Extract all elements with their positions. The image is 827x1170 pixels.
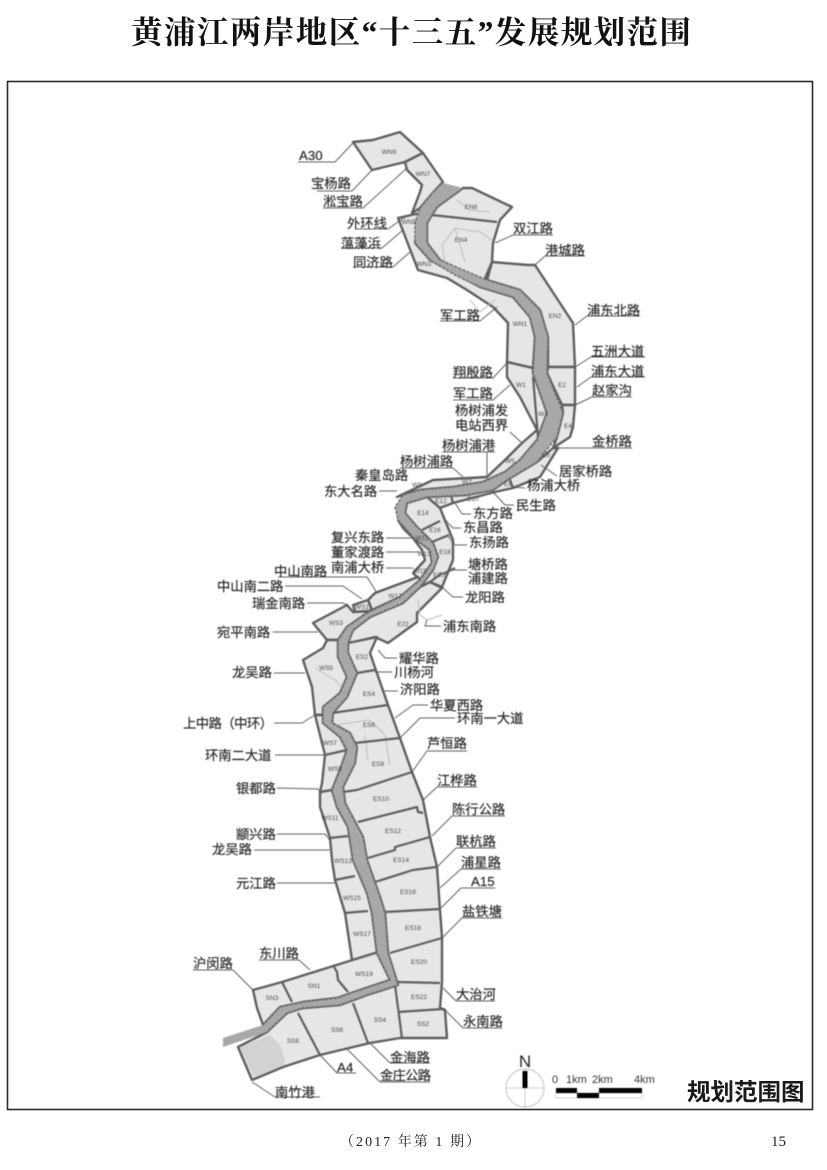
minor roads (315, 200, 495, 765)
label: 居家桥路: 居家桥路 (559, 463, 612, 479)
parcel codes: WS13 (334, 858, 352, 865)
label: 东昌路: 东昌路 (463, 520, 503, 535)
label: 翔殷路: 翔殷路 (453, 365, 493, 380)
parcel codes: W9 (412, 482, 422, 489)
label: 东方路 (455, 503, 513, 521)
parcel codes: W11 (416, 535, 429, 542)
label: 杨树浦路 (400, 454, 463, 477)
label: 元江路: 元江路 (236, 876, 276, 891)
label: 浦东大道 (577, 364, 645, 387)
road labels (183, 143, 645, 1100)
SS8 shaded area (240, 1035, 285, 1077)
label: 金庄公路: 金庄公路 (380, 1068, 431, 1083)
parcel codes: E2 (558, 382, 566, 389)
parcel codes: WS1 (355, 604, 369, 611)
label: 五洲大道: 五洲大道 (591, 344, 644, 359)
label: 外环线: 外环线 (347, 216, 387, 231)
parcel codes: W7 (462, 479, 472, 486)
label: 东扬路 (448, 535, 509, 550)
map name: 规划范围图 (687, 1079, 804, 1105)
footer: page number: 15 (771, 1134, 786, 1150)
parcel codes: EN6 (465, 204, 478, 211)
label: 浦东北路: 浦东北路 (587, 303, 640, 318)
label: 淞宝路: 淞宝路 (323, 194, 363, 209)
label: 银都路: 银都路 (236, 781, 276, 796)
parcel codes: W13 (417, 551, 431, 558)
label: 中山南二路: 中山南二路 (217, 579, 283, 594)
parcel codes: E10 (467, 496, 479, 503)
parcel codes: ES8 (372, 761, 385, 768)
parcel codes: W17 (388, 593, 402, 600)
parcel codes: E12 (435, 498, 447, 505)
label: 港城路 (535, 243, 585, 265)
label: 复兴东路 (331, 530, 413, 545)
scale bar: 0 (552, 1074, 558, 1086)
parcel codes: SS6 (331, 1027, 344, 1034)
label: 川杨河 (375, 665, 434, 680)
label: 宛平南路 (217, 625, 318, 640)
label: 蕰藻浜 (341, 230, 403, 251)
label: 董家渡路: 董家渡路 (331, 544, 384, 560)
label: 东川路 (259, 946, 310, 970)
label: A30: A30 (299, 148, 323, 163)
label: 浦星路 (440, 855, 501, 888)
label: 陈行公路: 陈行公路 (452, 801, 505, 817)
label: 环南二大道: 环南二大道 (205, 748, 271, 763)
parcel codes: SS4 (374, 1017, 387, 1024)
label: 龙吴路 (232, 665, 305, 680)
parcel codes: EN4 (455, 237, 468, 244)
label: 同济路: 同济路 (353, 255, 393, 270)
label: 耀华路 (378, 650, 439, 666)
label: 金桥路 (553, 434, 632, 449)
label: 塘桥路 浦建路 (452, 557, 508, 586)
scale bar: 2km (592, 1074, 613, 1086)
label: 复兴东路: 复兴东路 (331, 530, 384, 545)
label: 南竹港: 南竹港 (275, 1085, 316, 1100)
label: 东扬路: 东扬路 (469, 535, 509, 550)
river: Huangpu River (223, 183, 563, 1047)
label: 芦恒路: 芦恒路 (427, 736, 467, 751)
label: A15: A15 (471, 874, 495, 889)
parcel codes: SN1 (308, 983, 321, 990)
label: 杨树浦发电站西界: 杨树浦发 (455, 403, 508, 418)
label: 盐铁塘 (442, 904, 502, 938)
label: 军工路 south (453, 385, 510, 401)
label: 联杭路 (437, 834, 496, 867)
label: 翔殷路 (453, 363, 507, 380)
label: 浦东大道: 浦东大道 (591, 364, 644, 379)
parcel codes: E14 (417, 510, 429, 517)
label: 军工路 north (440, 307, 497, 323)
parcel codes: WS15 (343, 895, 361, 902)
parcel codes: WS9 (328, 766, 342, 773)
label: 军工路 north: 军工路 (440, 308, 480, 323)
label: 杨浦大桥: 杨浦大桥 (527, 478, 580, 493)
label: 浦东南路: 浦东南路 (443, 619, 496, 634)
parcel codes: W15 (413, 568, 427, 575)
parcel codes: WS3 (329, 620, 343, 627)
parcel codes: ES14 (393, 857, 409, 864)
label: 杨树浦发电站西界: 电站西界 (455, 418, 508, 433)
parcel codes: E20 (433, 572, 445, 579)
label: 东方路: 东方路 (473, 506, 513, 521)
label: 塘桥路 浦建路: 浦建路 (468, 571, 508, 586)
label: 龙阳路 (442, 587, 505, 605)
label: 东大名路: 东大名路 (324, 484, 377, 499)
label: 江桦路: 江桦路 (437, 773, 477, 788)
label: 塘桥路 浦建路: 塘桥路 (468, 557, 508, 572)
label: 浦星路: 浦星路 (461, 855, 501, 870)
label: 赵家沟 (575, 382, 632, 405)
label: 银都路 (236, 781, 322, 796)
label: 军工路 south: 军工路 (453, 386, 493, 401)
parcel codes: WS11 (321, 815, 339, 822)
parcel codes: E4 (564, 423, 572, 430)
label: 川杨河: 川杨河 (394, 665, 434, 680)
parcel codes: SS8 (287, 1038, 300, 1045)
parcel codes: W5 (505, 458, 515, 465)
label: 金庄公路 (347, 1049, 431, 1083)
label: A15 (441, 874, 495, 908)
parcel codes: SN3 (266, 995, 279, 1002)
parcel codes: ES10 (373, 796, 389, 803)
label: 港城路: 港城路 (545, 243, 585, 258)
parcel codes: WS17 (353, 931, 371, 938)
label: 元江路 (236, 876, 335, 891)
parcel codes: WN1 (513, 321, 528, 328)
label: 宝杨路 (311, 170, 372, 191)
label: A30 (298, 143, 353, 163)
label: 外环线 (347, 216, 405, 231)
parcel codes: ES12 (385, 828, 401, 835)
parcel codes: WN5 (402, 219, 417, 226)
label: 秦皇岛路: 秦皇岛路 (355, 468, 408, 483)
parcel codes: ES2 (356, 654, 369, 661)
label: 济阳路: 济阳路 (400, 682, 440, 697)
parcel codes (266, 149, 572, 1045)
north arrow: N (519, 1052, 531, 1071)
label: 耀华路: 耀华路 (399, 651, 439, 666)
label: 南浦大桥 (331, 560, 413, 575)
label: 蕰藻浜: 蕰藻浜 (341, 236, 381, 251)
label: 江桦路 (423, 773, 477, 800)
parcel codes: ES4 (363, 691, 376, 698)
parcel codes: ES6 (363, 722, 376, 729)
label: 沪闵路 (193, 956, 253, 990)
parcel codes: E6 (542, 452, 550, 459)
scale bar: 1km (566, 1074, 587, 1086)
parcel codes: WS19 (355, 971, 373, 978)
parcel codes: WS5 (319, 665, 333, 672)
label: 沪闵路: 沪闵路 (193, 956, 233, 971)
label: 杨树浦港 (442, 438, 496, 477)
label: 金桥路: 金桥路 (592, 434, 632, 449)
label: 瑞金南路: 瑞金南路 (252, 596, 305, 611)
footer: issue: （2017 年第 1 期） (340, 1133, 480, 1150)
label: 芦恒路 (412, 736, 467, 772)
label: 中山南路 (274, 564, 377, 593)
label: 上中路（中环）: 上中路（中环） (183, 716, 273, 731)
parcel codes: WN9 (382, 149, 397, 156)
label: 永南路: 永南路 (463, 1014, 503, 1029)
label: 颛兴路 (236, 827, 330, 842)
label: 赵家沟: 赵家沟 (592, 382, 632, 398)
parcel codes: E8 (504, 481, 512, 488)
label: 陈行公路 (432, 801, 505, 836)
label: 金海路 (370, 1043, 430, 1065)
parcel codes: W3 (538, 411, 548, 418)
label: 民生路 (493, 492, 556, 513)
label: 联杭路: 联杭路 (456, 834, 496, 849)
label: 环南二大道 (205, 748, 325, 763)
label: 永南路 (443, 1008, 503, 1029)
label: 东昌路 (445, 520, 503, 535)
map: planning area (223, 132, 575, 1080)
label: 华夏西路 (395, 698, 483, 718)
label: 同济路 (353, 252, 410, 270)
north arrow (506, 1052, 544, 1107)
parcel codes: W1 (516, 382, 526, 389)
label: 宛平南路: 宛平南路 (217, 625, 270, 640)
label: 五洲大道 (575, 344, 645, 367)
label: 瑞金南路 (252, 596, 347, 611)
label: 宝杨路: 宝杨路 (311, 176, 351, 191)
label: 杨树浦路: 杨树浦路 (400, 454, 453, 469)
label: 龙吴路 south (212, 842, 330, 857)
label: 淞宝路 (323, 168, 407, 209)
parcel codes: E18 (439, 549, 451, 556)
parcel codes: ES20 (411, 959, 427, 966)
label: 大治河: 大治河 (456, 987, 496, 1002)
label: A4: A4 (337, 1060, 353, 1075)
label: 盐铁塘: 盐铁塘 (462, 904, 502, 919)
label: 民生路: 民生路 (516, 498, 556, 513)
label: 南竹港 (252, 1082, 320, 1100)
parcel codes: WS7 (323, 740, 337, 747)
label: 华夏西路: 华夏西路 (430, 698, 483, 713)
label: 环南一大道: 环南一大道 (457, 711, 523, 726)
label: 南浦大桥: 南浦大桥 (331, 560, 384, 575)
label: 龙吴路: 龙吴路 (232, 665, 272, 680)
label: 东川路: 东川路 (259, 946, 299, 961)
parcel codes: EN2 (549, 313, 562, 320)
scale bar: 4km (634, 1074, 655, 1086)
label: 环南一大道 (400, 711, 523, 738)
label: 双江路 (495, 221, 553, 243)
parcel dividers (282, 215, 538, 1055)
parcel codes: E22 (397, 621, 409, 628)
scale bar (552, 1074, 655, 1098)
label: 中山南二路 (217, 579, 362, 599)
label: 中山南路: 中山南路 (274, 564, 327, 579)
label: 上中路（中环） (183, 715, 315, 731)
label: 浦东北路 (575, 303, 640, 325)
parcel codes: E16 (429, 527, 441, 534)
label: 龙吴路 south: 龙吴路 (212, 842, 252, 857)
title: 黄浦江两岸地区“十三五”发展规划范围 (131, 15, 691, 50)
label: 金海路: 金海路 (390, 1050, 430, 1065)
label: 杨树浦港: 杨树浦港 (442, 438, 496, 453)
land parcels (238, 132, 575, 1080)
label: 杨树浦发电站西界 (455, 403, 522, 443)
parcel codes: ES22 (411, 994, 427, 1001)
parcel codes: WN7 (416, 171, 431, 178)
parcel codes: SS2 (417, 1021, 430, 1028)
parcel codes: ES16 (400, 889, 416, 896)
label: 颛兴路: 颛兴路 (236, 827, 276, 842)
parcel codes: ES18 (405, 925, 421, 932)
label: 双江路: 双江路 (513, 221, 553, 236)
label: 董家渡路 (331, 544, 420, 560)
label: 龙阳路: 龙阳路 (465, 590, 505, 605)
label: A4 (320, 1055, 356, 1075)
parcel codes: WN3 (417, 261, 432, 268)
